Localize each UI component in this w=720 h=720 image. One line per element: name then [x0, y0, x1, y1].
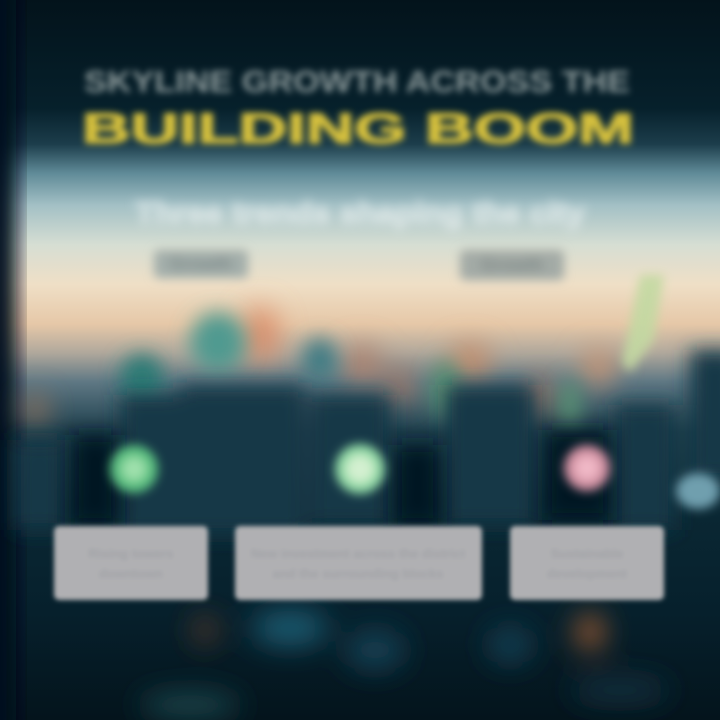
chart label: left: Growth: [170, 254, 232, 274]
city skyline: [14, 275, 720, 535]
panel: right card: Sustainable: [551, 546, 623, 561]
dark left edge band: [0, 0, 16, 720]
skyline: lit corner block: [676, 473, 720, 509]
skyline: green tower tops: [120, 312, 580, 431]
foreground city lights: [140, 610, 670, 717]
panel: centre card: [235, 526, 482, 600]
panel: left card: [54, 526, 208, 600]
skyline: bright green spire: [622, 275, 664, 372]
panel: right card: [510, 526, 664, 600]
icon: pink circle right: [564, 445, 610, 491]
panel: centre card: New investment across the district: [251, 546, 466, 561]
skyline: near-black gaps: [72, 430, 610, 525]
panel: centre card: and the surrounding blocks: [272, 566, 444, 581]
panel: right card: development: [547, 566, 628, 581]
skyline: warm glow accents: [23, 307, 614, 424]
chart label: right: [460, 250, 564, 280]
title: first line: SKYLINE GROWTH ACROSS THE: [84, 64, 630, 99]
subtitle: Three trends shaping the city: [135, 197, 585, 230]
icon: pale green circle centre: [335, 444, 385, 494]
panel: left card: Rising towers: [88, 546, 174, 561]
panel: left card: downtown: [99, 566, 163, 581]
chart label: right: Growth: [480, 255, 544, 275]
skyline: dark towers: [14, 350, 720, 535]
title: second yellow line: BUILDING BOOM: [82, 105, 634, 153]
icon: green circle left: [110, 445, 158, 493]
chart label: left: [154, 250, 248, 278]
title: [82, 64, 634, 153]
